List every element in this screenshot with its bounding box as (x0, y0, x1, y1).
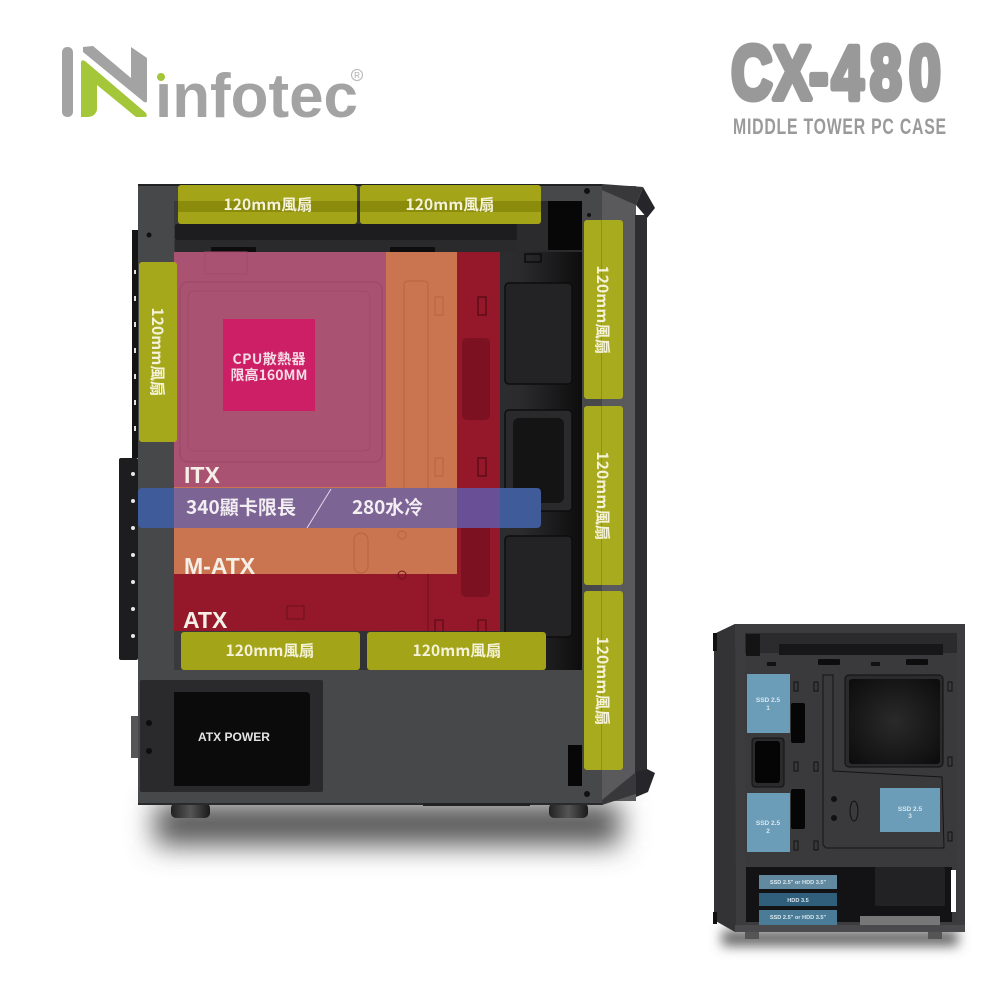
fan: bottom right (367, 632, 546, 670)
label: ATX: ATX (183, 607, 228, 633)
label: M-ATX: M-ATX (184, 553, 256, 579)
SSD 1: 1 (766, 705, 770, 712)
main case shadow (155, 803, 620, 845)
case left slot strip (132, 230, 138, 458)
feet (171, 803, 210, 818)
title: CX-480: CX-480 (731, 31, 941, 116)
board zone: M-ATX (174, 252, 457, 579)
motherboard tray outline (823, 675, 944, 848)
subtitle: MIDDLE TOWER PC CASE (733, 116, 946, 140)
rear view case (713, 624, 965, 939)
drive bay 1 (759, 875, 837, 889)
board zone: ATX (174, 252, 500, 638)
fan: front 2: 120mm風扇 (592, 452, 614, 540)
fan: front 3: 120mm風扇 (592, 636, 614, 726)
band: 340 GPU / 280 liquid cooling (138, 488, 541, 528)
fan: top right (360, 185, 541, 224)
SSD 3: 3 (908, 813, 912, 820)
CPU cooler box: CPU散熱器 (232, 349, 306, 369)
CPU cooler box: 限高160MM (230, 365, 308, 385)
PSU bay (140, 680, 323, 792)
SSD 1: SSD 2.5 (756, 697, 780, 704)
fan: bottom left (181, 632, 360, 670)
text: 280 liquid cooling: 280水冷 (352, 493, 423, 520)
SSD 2: 2 (766, 828, 770, 835)
drive bay 3 (759, 910, 837, 925)
CPU cooler box (223, 319, 315, 411)
slots (791, 703, 805, 743)
fan: rear (139, 262, 177, 442)
fan: front 2 (584, 406, 623, 585)
PSU bay: ATX POWER (198, 730, 270, 744)
logo: infotec: infotec (155, 62, 358, 131)
drive bay 1: SSD 2.5" or HDD 3.5" (770, 880, 826, 886)
small cutout (752, 738, 784, 787)
fan: bottom right: 120mm風扇 (412, 639, 502, 661)
cutouts (505, 283, 572, 384)
drive bay 3: SSD 2.5" or HDD 3.5" (770, 915, 826, 921)
fan: bottom left: 120mm風扇 (226, 639, 314, 661)
board zone: ITX (174, 252, 386, 487)
left bracket (119, 458, 138, 660)
lower compartment (746, 867, 952, 922)
logo: infotec (62, 46, 362, 131)
logo: infotec: R (354, 71, 360, 80)
fan: top right: 120mm風扇 (406, 193, 494, 215)
SSD 1 (747, 674, 790, 733)
SSD 2: SSD 2.5 (756, 820, 780, 827)
front panel (602, 186, 636, 801)
fan: front 3 (584, 591, 623, 770)
fan: top left: 120mm風扇 (224, 193, 312, 215)
text: 340 GPU limit: 340顯卡限長 (186, 493, 296, 520)
SSD 3 (880, 788, 940, 832)
case body (138, 184, 603, 805)
fan: rear: 120mm風扇 (147, 308, 169, 396)
main case (119, 184, 655, 818)
SSD 3: SSD 2.5 (898, 806, 922, 813)
drive bay 2 (759, 893, 837, 906)
fan: top left (178, 185, 357, 224)
SSD 2 (747, 793, 790, 852)
drive bay 2: HDD 3.5 (787, 898, 809, 904)
CPU cutout (845, 675, 943, 767)
label: ITX: ITX (184, 462, 220, 488)
fan: front 1 (584, 220, 623, 399)
screw marks (146, 232, 152, 238)
interior back plate (174, 201, 582, 670)
top tabs (818, 659, 840, 665)
rear view shadow (722, 930, 958, 946)
fan: front 1: 120mm風扇 (592, 266, 614, 354)
